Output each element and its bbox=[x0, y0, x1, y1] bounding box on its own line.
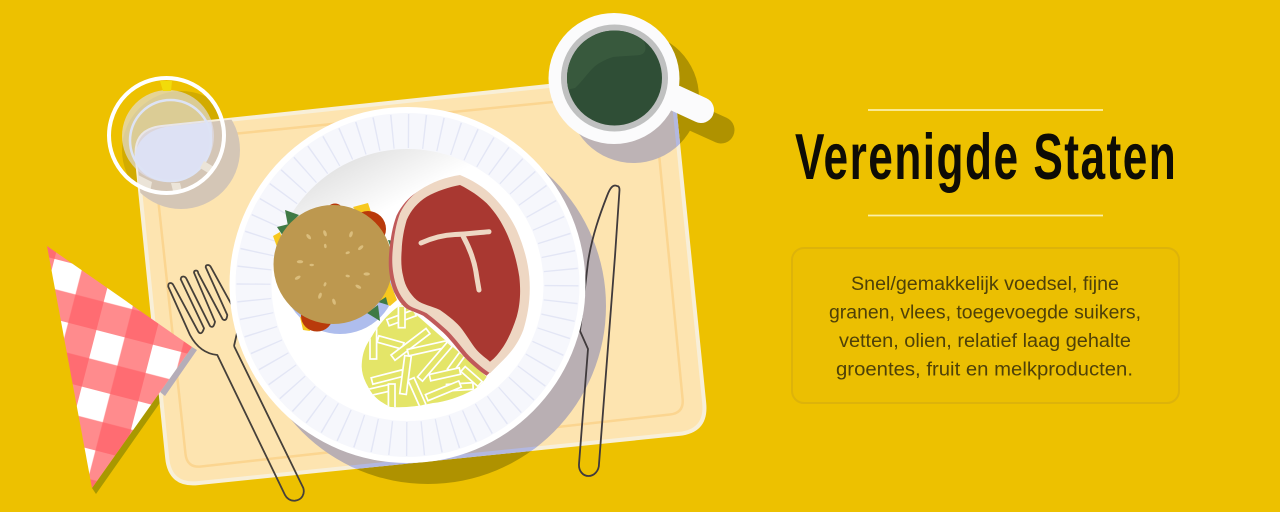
coffee highlight bbox=[566, 26, 646, 90]
coffee cup bbox=[548, 13, 701, 144]
bun bbox=[274, 205, 392, 324]
lemon wedge bbox=[160, 81, 172, 91]
plate rim bbox=[230, 107, 586, 463]
coffee bbox=[567, 30, 662, 126]
napkin bbox=[47, 246, 192, 488]
steak edge bbox=[389, 178, 526, 376]
glass inner ring bbox=[130, 100, 211, 181]
rim ridges bbox=[254, 131, 562, 439]
description text: groentes, fruit en melkproducten. bbox=[836, 360, 1133, 380]
shadows on tray bbox=[137, 110, 678, 467]
description text: vetten, olien, relatief laag gehalte bbox=[839, 331, 1131, 352]
cheese bbox=[273, 203, 397, 331]
sesame seeds bbox=[294, 230, 370, 305]
title: Verenigde Staten bbox=[795, 121, 1176, 193]
tray bbox=[137, 76, 704, 483]
water glass bbox=[109, 78, 224, 193]
burger base bbox=[283, 220, 397, 334]
steak meat bbox=[401, 185, 520, 362]
steak bbox=[389, 175, 530, 376]
fries bbox=[362, 304, 487, 408]
description text: Snel/gemakkelijk voedsel, fijne bbox=[851, 274, 1119, 295]
steak fat bbox=[392, 175, 530, 373]
cup inner ring bbox=[561, 24, 668, 132]
bottom divider bbox=[868, 214, 1103, 216]
t-bone bbox=[421, 232, 489, 290]
tomato bbox=[301, 204, 386, 332]
description text: granen, vlees, toegevoegde suikers, bbox=[829, 302, 1141, 324]
box outline bbox=[792, 248, 1179, 403]
burger bbox=[273, 203, 400, 334]
glass outer ring bbox=[109, 78, 224, 193]
knife bbox=[579, 185, 620, 476]
plate well bbox=[272, 149, 544, 421]
fork bbox=[168, 265, 304, 501]
shadows on table bbox=[92, 32, 721, 494]
cup handle bbox=[675, 98, 701, 110]
cup body bbox=[548, 13, 680, 144]
plate bbox=[230, 107, 586, 463]
top divider bbox=[868, 109, 1103, 111]
glass disc bbox=[122, 90, 214, 182]
description text bbox=[829, 274, 1141, 380]
glass inner fill bbox=[135, 122, 212, 182]
lettuce bbox=[277, 210, 400, 321]
glass rim marks bbox=[138, 161, 214, 192]
tray rim under shadow bbox=[349, 112, 680, 469]
description box bbox=[792, 248, 1179, 403]
